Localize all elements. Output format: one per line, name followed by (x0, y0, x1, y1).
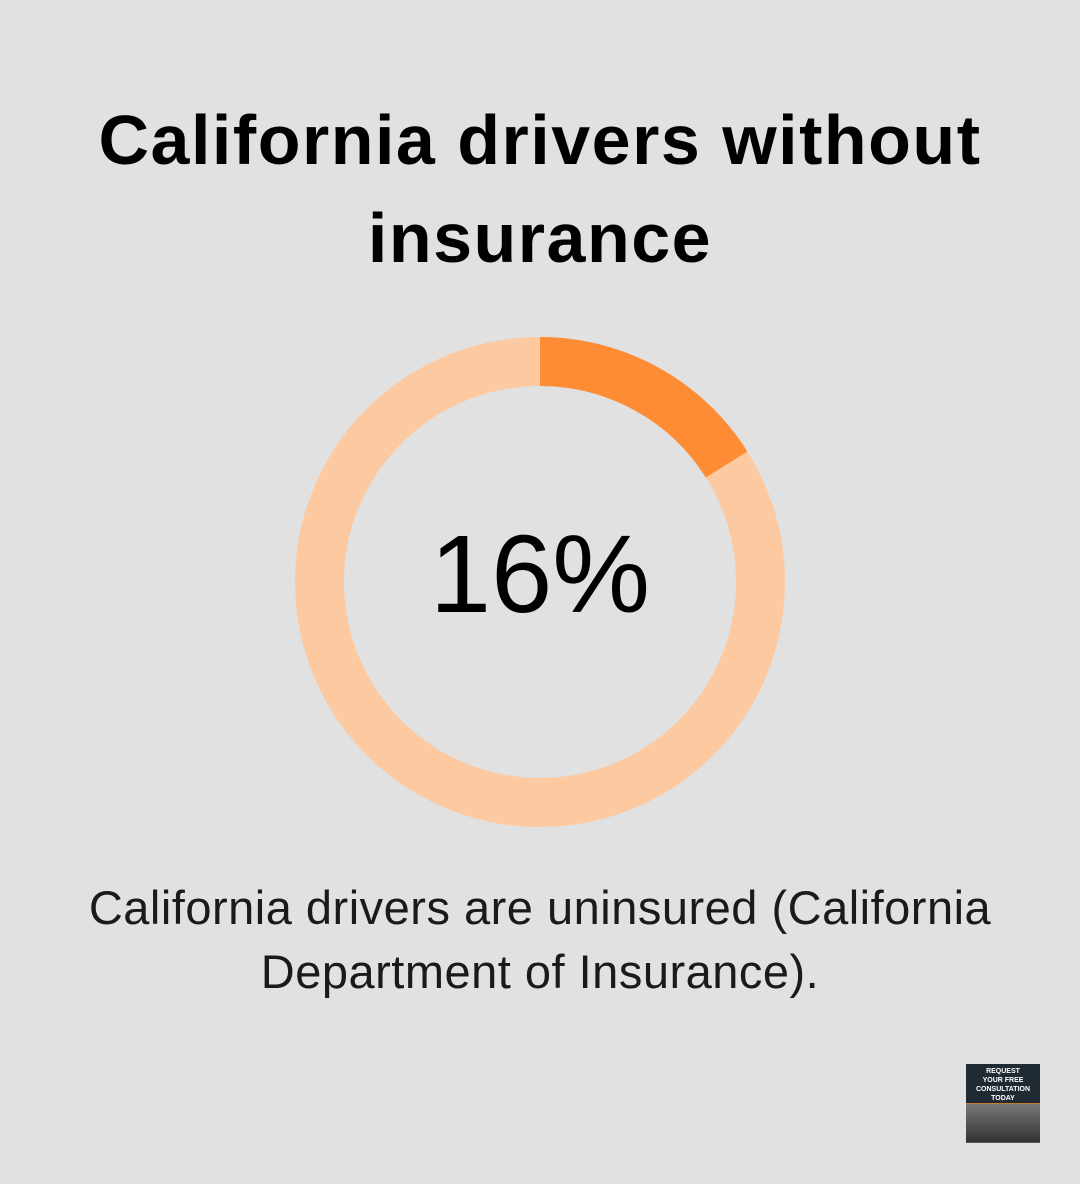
title: insurance (368, 199, 712, 277)
value: 16%: 16% (430, 513, 650, 636)
title: California drivers without (98, 101, 982, 179)
badge: consultation: CONSULTATION (976, 1086, 1030, 1093)
badge: consultation: TODAY (991, 1095, 1015, 1102)
caption: California drivers are uninsured (California (89, 881, 991, 934)
title (98, 101, 982, 277)
badge: consultation: YOUR FREE (983, 1077, 1023, 1084)
caption: Department of Insurance). (261, 945, 819, 998)
badge: consultation (966, 1064, 1040, 1143)
caption (89, 881, 991, 998)
badge: consultation: REQUEST (986, 1068, 1020, 1075)
